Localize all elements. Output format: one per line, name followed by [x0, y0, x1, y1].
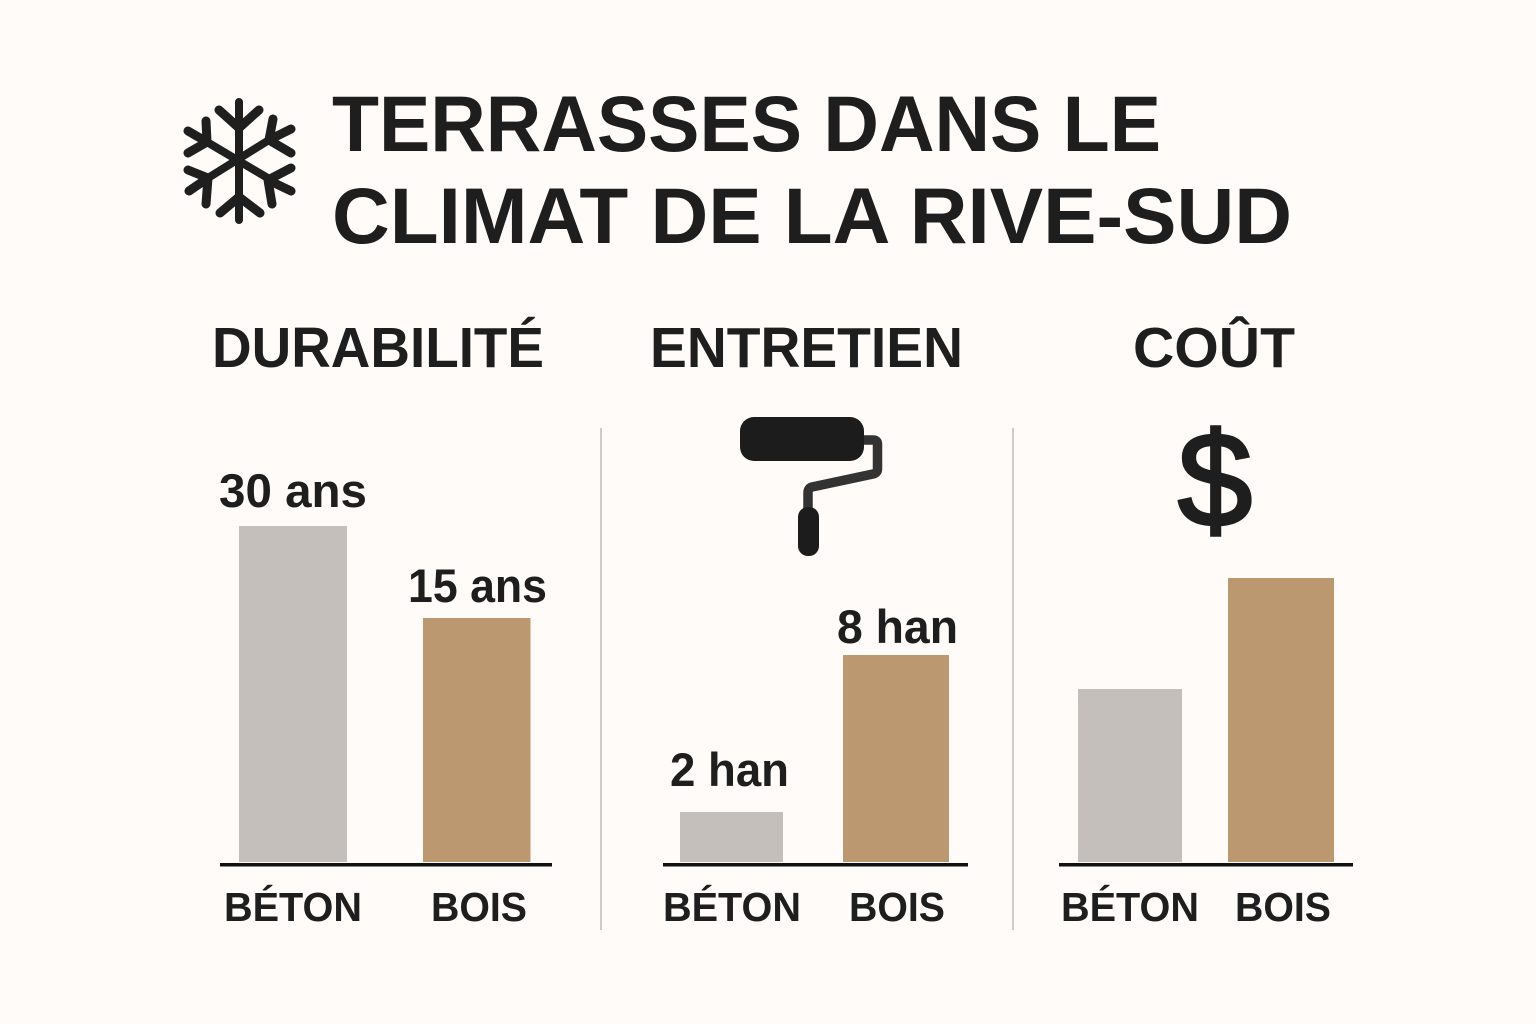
bar: béton	[1078, 689, 1182, 862]
icon: paint roller	[740, 417, 878, 556]
label: béton: BÉTON	[663, 884, 801, 930]
heading: coût: COÛT	[1133, 315, 1295, 380]
label: béton: BÉTON	[224, 884, 362, 930]
value: 15 ans: 15 ans	[408, 559, 547, 612]
divider right	[1012, 428, 1014, 930]
panel: entretien chart	[663, 600, 968, 930]
label: béton: BÉTON	[1061, 884, 1199, 930]
title: CLIMAT DE LA RIVE-SUD	[332, 171, 1292, 260]
value: 30 ans: 30 ans	[219, 464, 367, 517]
title	[332, 79, 1292, 260]
axis	[1059, 863, 1353, 866]
bar: bois	[1228, 578, 1334, 862]
title: TERRASSES DANS LE	[332, 79, 1161, 168]
panel: durabilité chart	[219, 464, 552, 930]
heading: entretien: ENTRETIEN	[650, 316, 963, 380]
label: bois: BOIS	[849, 884, 945, 930]
bar: bois 15 ans	[423, 618, 530, 862]
bar: béton 30 ans	[239, 526, 347, 862]
label: bois: BOIS	[1235, 884, 1331, 930]
icon: snowflake	[188, 102, 291, 220]
panel: coût chart	[1059, 578, 1353, 930]
icon: dollar sign: $	[1178, 406, 1252, 555]
axis	[663, 863, 968, 866]
divider left	[600, 428, 602, 930]
heading: durabilité: DURABILITÉ	[212, 316, 544, 380]
value: 2 han: 2 han	[670, 743, 789, 796]
value: 8 han: 8 han	[837, 600, 958, 653]
bar: bois 8 han	[843, 655, 949, 862]
label: bois: BOIS	[431, 884, 527, 930]
axis	[220, 863, 552, 866]
bar: béton 2 han	[680, 812, 783, 862]
